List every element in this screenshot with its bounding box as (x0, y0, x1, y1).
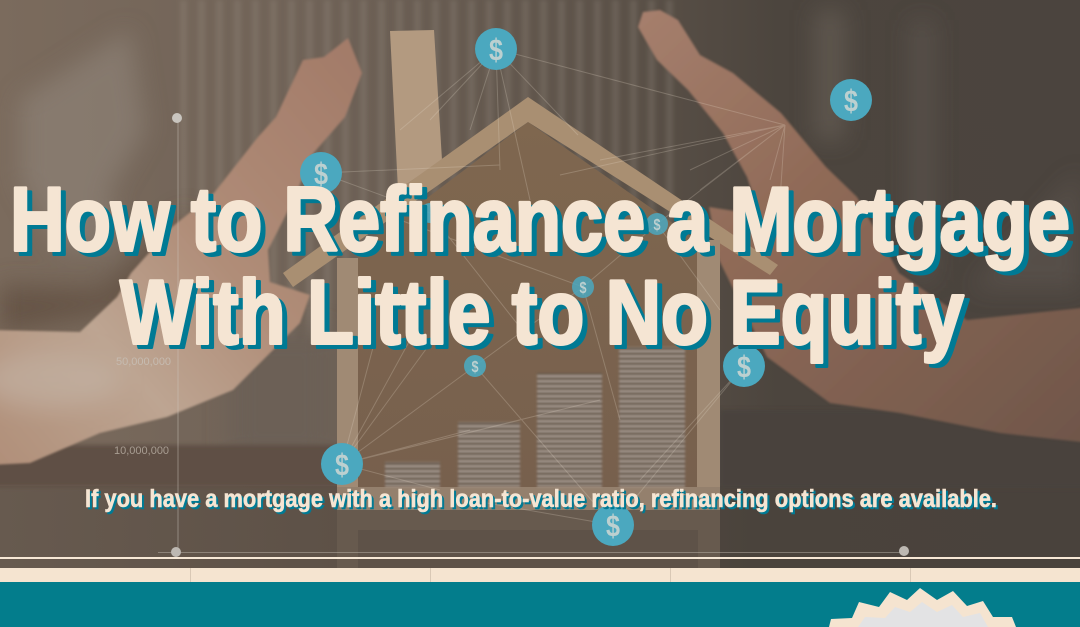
sweater stripes (170, 0, 680, 340)
icon: dollar coin bottom (592, 504, 634, 546)
axis label: 50,000,000: 50,000,000 (116, 356, 171, 368)
icon: dollar coin small centre: $ (580, 280, 587, 297)
cream band (0, 568, 1080, 582)
icon: dollar coin lower left: $ (335, 447, 349, 482)
icon: dollar coin small centre (572, 276, 594, 298)
chimney (390, 30, 442, 190)
house interior (358, 122, 697, 487)
starburst badge (829, 588, 1016, 627)
sweater fold highlight (0, 10, 1080, 460)
reflection (337, 510, 720, 568)
icon: dollar coin small lower: $ (472, 359, 479, 376)
wooden house (283, 30, 778, 568)
icon: dollar coin left: $ (314, 156, 328, 191)
title (10, 170, 1070, 364)
icon: dollar coin lower right: $ (737, 349, 751, 384)
cream divider line (0, 557, 1080, 559)
icon: dollar coin small under title (420, 203, 440, 223)
roof (283, 97, 778, 287)
icon: dollar coin bottom: $ (606, 508, 620, 543)
right hand (638, 10, 1080, 443)
axis label: 10,000,000: 10,000,000 (114, 445, 169, 457)
icon: dollar coin small centre right: $ (654, 217, 661, 234)
icon: dollar coin small centre right (646, 213, 668, 235)
coin stacks (385, 347, 685, 487)
icon: dollar coin upper right: $ (844, 83, 858, 118)
icon: dollar coin left (300, 152, 342, 194)
icon: dollar coin small lower (464, 355, 486, 377)
icon: dollar coin lower right (723, 345, 765, 387)
icon: dollar coin top (475, 28, 517, 70)
icon: dollar coin lower left (321, 443, 363, 485)
icon: dollar coin top: $ (489, 32, 503, 67)
walls (337, 258, 358, 490)
icon: dollar coin upper right (830, 79, 872, 121)
table (0, 486, 1080, 568)
network lines (321, 49, 785, 525)
chart axes (158, 113, 909, 557)
teal panel (0, 582, 1080, 627)
left hand (0, 38, 362, 465)
